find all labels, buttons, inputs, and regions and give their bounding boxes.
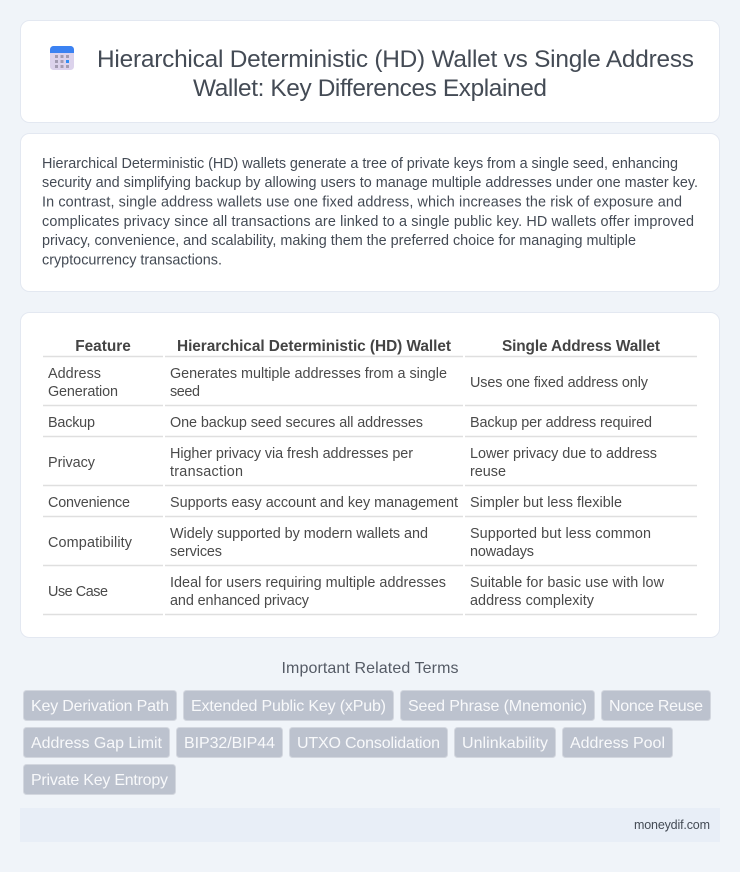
- row: compatibility: Widely supported by modern wallets and: [170, 526, 428, 542]
- table header: Feature: [75, 338, 131, 355]
- related terms tags: Address Gap Limit: [31, 735, 163, 752]
- title: [97, 46, 694, 102]
- row: address generation: Generation: [48, 384, 118, 400]
- title: Hierarchical Deterministic (HD) Wallet vs Single Address: [97, 46, 694, 73]
- row: backup: One backup seed secures all addresses: [170, 415, 423, 431]
- related terms tags: Seed Phrase (Mnemonic): [408, 698, 587, 715]
- row: use case: [48, 575, 665, 609]
- row: backup: Backup per address required: [470, 415, 652, 431]
- footer: moneydif.com: [634, 818, 710, 832]
- intro paragraph card: cryptocurrency transactions.: [42, 252, 222, 268]
- intro paragraph card: Hierarchical Deterministic (HD) wallets generate a tree of private keys from a single seed, enhancing: [42, 156, 678, 172]
- intro paragraph card: [20, 134, 720, 292]
- row: use case: Ideal for users requiring multiple addresses: [170, 575, 446, 591]
- related terms tags: Extended Public Key (xPub): [191, 698, 386, 715]
- row: address generation: Uses one fixed address only: [470, 375, 649, 391]
- footer: [20, 808, 720, 842]
- row: privacy: transaction: [170, 464, 243, 480]
- row: privacy: [48, 446, 657, 480]
- row: privacy: reuse: [470, 464, 506, 480]
- related terms tags: UTXO Consolidation: [297, 735, 440, 752]
- related terms tags: [24, 690, 710, 794]
- intro paragraph card: complicates privacy since all transactions are linked to a single public key. HD wallets offer improved: [42, 214, 694, 230]
- row: privacy: Privacy: [48, 455, 96, 471]
- row: compatibility: nowadays: [470, 544, 534, 560]
- related terms tags: Unlinkability: [462, 735, 548, 752]
- row: compatibility: services: [170, 544, 222, 560]
- intro paragraph card: security and simplifying backup by allowing users to manage multiple addresses under one master key.: [42, 175, 698, 191]
- related terms tags: Key Derivation Path: [31, 698, 169, 715]
- row: use case: address complexity: [470, 593, 595, 609]
- icon: calendar: [50, 46, 74, 70]
- header card: [20, 20, 720, 122]
- related terms tags: Nonce Reuse: [609, 698, 703, 715]
- row: backup: Backup: [48, 415, 95, 431]
- table header: Hierarchical Deterministic (HD) Wallet: [177, 338, 451, 355]
- intro paragraph card: privacy, convenience, and scalability, making them the preferred choice for managing multiple: [42, 233, 636, 249]
- row: compatibility: Supported but less common: [470, 526, 651, 542]
- table header: [75, 338, 660, 355]
- row: use case: Suitable for basic use with low: [470, 575, 665, 591]
- related terms tags: Address Pool: [570, 735, 665, 752]
- row: convenience: Simpler but less flexible: [470, 495, 622, 511]
- related terms heading: Important Related Terms: [282, 660, 458, 677]
- row: use case: Use Case: [48, 584, 108, 600]
- title: Wallet: Key Differences Explained: [193, 75, 547, 102]
- row: address generation: seed: [170, 384, 200, 400]
- intro paragraph card: In contrast, single address wallets use one fixed address, which increases the risk of exposure and: [42, 194, 682, 210]
- row: privacy: Higher privacy via fresh addresses per: [170, 446, 413, 462]
- row: privacy: Lower privacy due to address: [470, 446, 657, 462]
- row: compatibility: Compatibility: [48, 535, 133, 551]
- row: compatibility: [48, 526, 651, 560]
- row: convenience: [48, 495, 622, 511]
- row: backup: [48, 415, 652, 431]
- row: use case: and enhanced privacy: [170, 593, 310, 609]
- related terms tags: Private Key Entropy: [31, 772, 168, 789]
- comparison table card: [20, 312, 720, 638]
- row: address generation: [48, 366, 649, 400]
- related terms tags: BIP32/BIP44: [184, 735, 275, 752]
- table header: Single Address Wallet: [502, 338, 660, 355]
- row: convenience: Supports easy account and key management: [170, 495, 458, 511]
- row: convenience: Convenience: [48, 495, 130, 511]
- row: address generation: Address: [48, 366, 101, 382]
- row: address generation: Generates multiple addresses from a single: [170, 366, 447, 382]
